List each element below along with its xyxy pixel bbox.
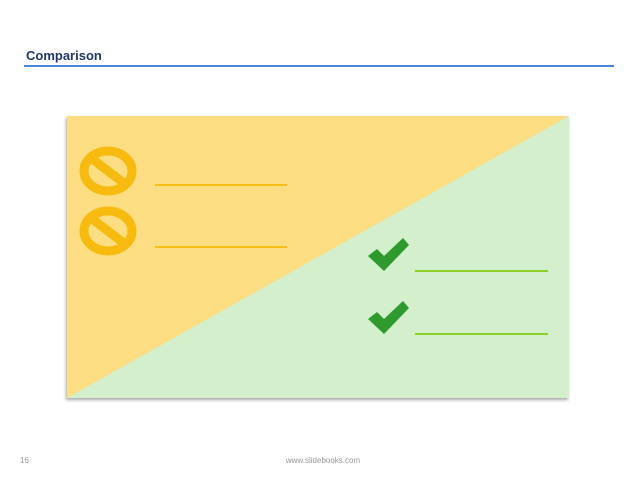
icon: prohibited 2 — [84, 211, 132, 251]
icon: check 1 — [368, 238, 409, 271]
text: www.slidebooks.com — [286, 456, 360, 465]
positive lines — [415, 271, 548, 334]
icon: check 2 — [368, 301, 409, 334]
icon: prohibited 1 — [84, 151, 132, 191]
footer: 16 — [20, 456, 29, 465]
title: Comparison — [26, 48, 102, 63]
negative lines — [155, 185, 287, 247]
